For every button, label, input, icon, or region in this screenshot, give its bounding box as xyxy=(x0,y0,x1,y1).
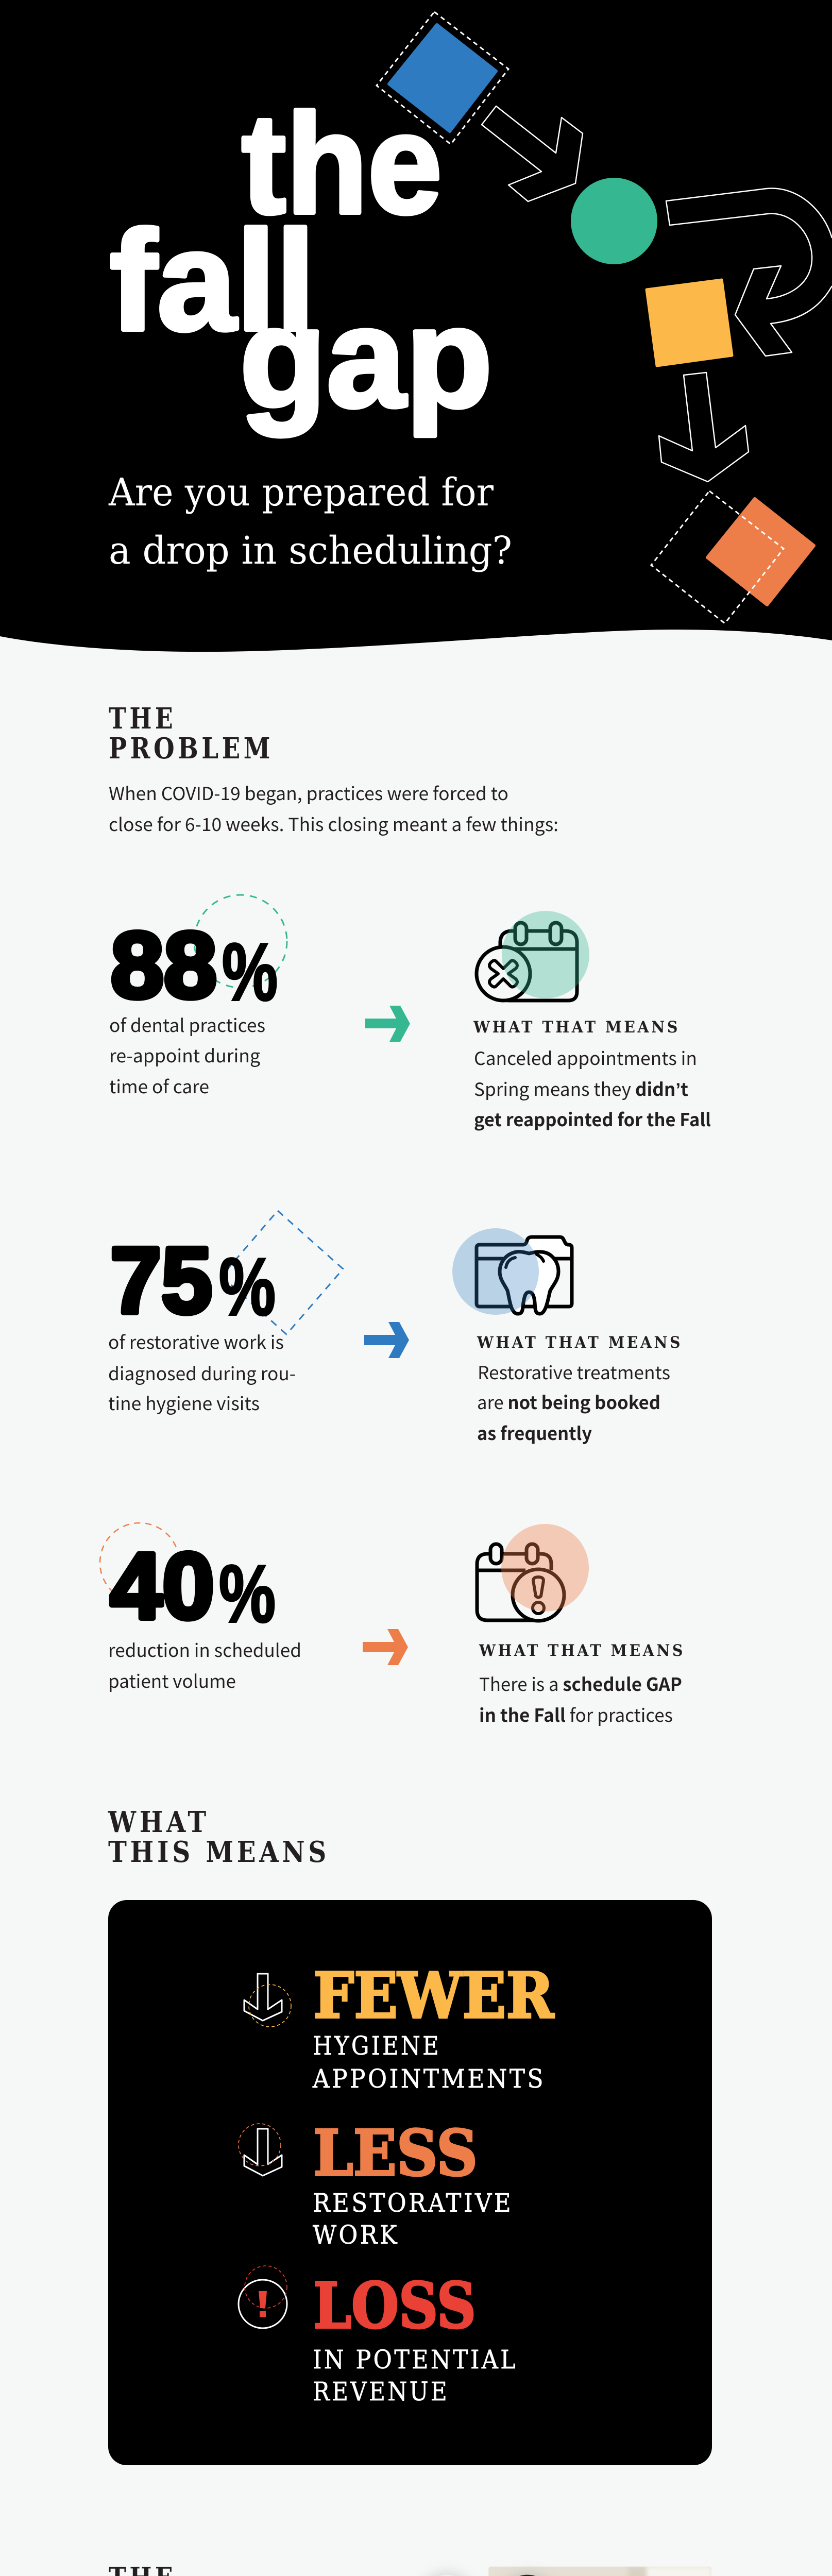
heading: the problem: THE xyxy=(109,702,176,736)
text: 75 percent description: tine hygiene visits xyxy=(108,1389,260,1416)
text block: problem intro xyxy=(109,779,558,837)
arrow: outlined u-turn arrow xyxy=(666,189,832,356)
heading: the problem xyxy=(109,702,274,766)
title: fall xyxy=(110,201,315,360)
text: 40 percent description: reduction in scheduled xyxy=(108,1636,301,1663)
number: 75% xyxy=(110,1228,276,1333)
text: what that means 1: Canceled appointments in xyxy=(474,1044,697,1071)
text: what that means 3 xyxy=(479,1641,685,1727)
text: restorative work: RESTORATIVE xyxy=(313,2188,513,2218)
panel: what this means black card xyxy=(108,1900,712,2465)
text: 75 percent description: diagnosed during rou- xyxy=(108,1360,296,1386)
text: what that means 1: WHAT THAT MEANS xyxy=(473,1018,680,1037)
text: loss: LOSS xyxy=(313,2268,476,2343)
dashed diamond decoration blue xyxy=(222,1211,343,1334)
panel: stat 40 percent xyxy=(100,1523,301,1693)
text: hygiene appointments: HYGIENE xyxy=(313,2031,441,2061)
text: in potential revenue: REVENUE xyxy=(313,2377,449,2406)
title xyxy=(110,84,493,437)
text: what that means 1: Spring means they didn’t xyxy=(474,1075,688,1101)
icon: yellow square xyxy=(647,280,732,366)
text: what that means 1: get reappointed for the Fall xyxy=(474,1106,711,1132)
dashed circle decoration orange xyxy=(100,1523,179,1602)
text: what that means 3: WHAT THAT MEANS xyxy=(479,1641,685,1660)
text: 40 percent description xyxy=(108,1636,301,1693)
arrow: outlined diagonal arrow xyxy=(482,106,583,201)
text: what that means 2: as frequently xyxy=(477,1419,592,1446)
avatar shadows xyxy=(396,2574,580,2576)
icon: alert red ring xyxy=(239,2266,287,2328)
subtitle: a drop in scheduling? xyxy=(109,529,512,573)
text: restorative work xyxy=(313,2188,513,2250)
avatar: blonde woman xyxy=(439,2575,454,2576)
text: hygiene appointments xyxy=(312,2031,546,2094)
text: 75 percent description xyxy=(108,1328,296,1416)
title: the xyxy=(242,84,442,243)
text: what that means 1 xyxy=(473,1018,711,1132)
text: 88 percent description: of dental practices xyxy=(109,1011,265,1038)
photo: man with laptop and phone xyxy=(427,2567,711,2576)
number: 88% xyxy=(111,912,278,1018)
text: 88 percent description xyxy=(109,1011,265,1099)
text: what that means 3: in the Fall for practices xyxy=(479,1701,673,1727)
heading: what this means xyxy=(108,1805,330,1869)
subtitle xyxy=(108,470,512,573)
text: in potential revenue: IN POTENTIAL xyxy=(313,2345,518,2375)
text: what that means 2 xyxy=(477,1333,683,1446)
panel: hero black header xyxy=(0,0,832,652)
text: hygiene appointments: APPOINTMENTS xyxy=(312,2064,546,2094)
icon: down arrow yellow ring xyxy=(244,1974,291,2027)
text: what that means 3: There is a schedule GAP xyxy=(479,1670,682,1697)
number: 75%: % xyxy=(219,1242,276,1332)
icon: blue diamond with dotted outline xyxy=(377,12,508,144)
text: less: LESS xyxy=(313,2116,478,2190)
text: in potential revenue xyxy=(313,2345,518,2406)
arrow: orange xyxy=(363,1629,408,1665)
number: 40%: 40 xyxy=(110,1533,214,1638)
text: fewer: FEWER xyxy=(313,1958,554,2032)
icon: green circle xyxy=(571,178,657,264)
icon: calendar with alert xyxy=(477,1524,589,1621)
arrow: outlined down arrow xyxy=(659,372,749,482)
text: restorative work: WORK xyxy=(313,2220,399,2250)
number: 75%: 75 xyxy=(110,1228,212,1333)
text: 75 percent description: of restorative work is xyxy=(108,1328,284,1354)
panel: stat 88 percent xyxy=(109,895,287,1099)
text: what that means 2: Restorative treatments xyxy=(478,1359,670,1385)
title: gap xyxy=(240,278,493,437)
text: what that means 2: are not being booked xyxy=(477,1388,660,1415)
heading: what this means: THIS MEANS xyxy=(108,1835,330,1869)
text block: problem intro: close for 6-10 weeks. This closing meant a few things: xyxy=(109,810,558,837)
heading: the problem: PROBLEM xyxy=(109,732,274,766)
icon: folder with tooth xyxy=(452,1228,572,1315)
avatar: woman curly hair red top xyxy=(519,2575,536,2576)
text: 88 percent description: re-appoint during xyxy=(109,1042,260,1068)
number: 40%: % xyxy=(219,1549,276,1639)
dashed circle decoration green xyxy=(194,895,287,988)
number: 88%: 88 xyxy=(111,912,217,1018)
panel: stat 75 percent xyxy=(108,1211,343,1416)
icon: orange diamond with dotted outline xyxy=(651,491,814,623)
icon: calendar with x xyxy=(477,911,589,1001)
arrow: blue xyxy=(364,1322,409,1358)
text: 40 percent description: patient volume xyxy=(108,1667,236,1693)
text block: problem intro: When COVID-19 began, practices were forced to xyxy=(109,779,508,806)
text: what that means 2: WHAT THAT MEANS xyxy=(477,1333,683,1352)
arrow: green xyxy=(365,1006,410,1042)
text: 88 percent description: time of care xyxy=(109,1073,209,1099)
number: 40% xyxy=(110,1533,276,1639)
heading: what this means: WHAT xyxy=(108,1805,210,1839)
icon: down arrow orange ring xyxy=(239,2124,282,2176)
number: 88%: % xyxy=(222,927,278,1018)
subtitle: Are you prepared for xyxy=(108,470,494,515)
